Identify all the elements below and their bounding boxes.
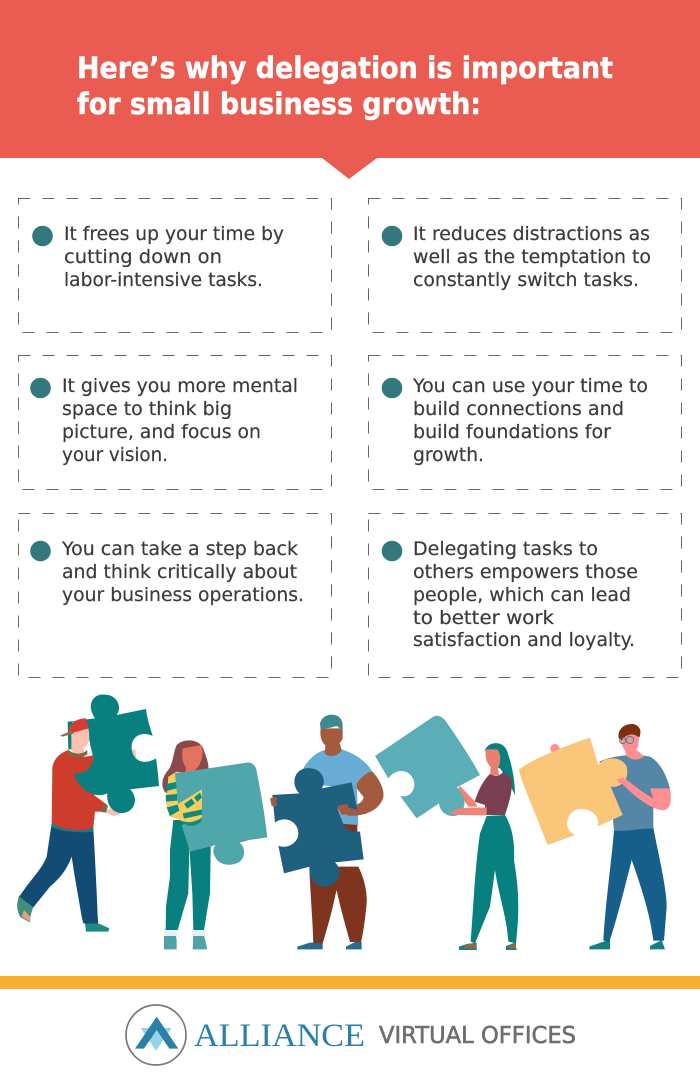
panel: empowers others (368, 514, 682, 678)
logo (126, 1005, 576, 1065)
panel: frees up time: It frees up your time by (64, 223, 284, 245)
panel: step back (18, 514, 332, 678)
puzzle piece: turquoise (375, 716, 487, 818)
panel: mental space: space to think big (62, 398, 232, 420)
panel: reduces distractions: well as the temptation to (413, 246, 651, 268)
panel: build connections (368, 356, 682, 490)
panel: step back: your business operations. (62, 584, 304, 606)
panel: mental space: picture, and focus on (62, 421, 261, 443)
panel: empowers others: others empowers those (413, 561, 638, 583)
panel: empowers others: Delegating tasks to (413, 538, 598, 560)
panel: build connections: build connections and (413, 398, 624, 420)
figure: man with glasses and yellow piece (519, 724, 671, 949)
figure: man in blue t-shirt with dark blue piece (270, 715, 384, 949)
panel: reduces distractions: It reduces distractions as (413, 223, 650, 245)
panel: empowers others: satisfaction and loyalty. (413, 629, 635, 651)
panel: build connections: build foundations for (413, 421, 611, 443)
panel: mental space: your vision. (62, 444, 168, 466)
panel: mental space: It gives you more mental (62, 375, 298, 397)
panel: mental space (18, 356, 332, 490)
panel: reduces distractions: constantly switch tasks. (413, 269, 639, 291)
panel: build connections: You can use your time to (412, 375, 648, 397)
logo mark (126, 1005, 186, 1065)
footer accent bar (0, 976, 700, 989)
illustration: people with puzzle pieces (17, 695, 671, 950)
panel: empowers others: to better work (413, 607, 554, 629)
panel: reduces distractions (368, 198, 682, 332)
logo subtitle: VIRTUAL OFFICES (379, 1023, 576, 1049)
panel: frees up time (18, 198, 332, 332)
figure: woman with light teal piece (162, 740, 267, 949)
header banner (0, 0, 700, 179)
panel: step back: and think critically about (62, 561, 297, 583)
title (77, 51, 613, 121)
panel: frees up time: labor-intensive tasks. (64, 269, 263, 291)
logo wordmark: ALLIANCE (194, 1018, 365, 1054)
title: for small business growth: (77, 87, 481, 121)
panel: frees up time: cutting down on (64, 246, 222, 268)
panel: empowers others: people, which can lead (413, 584, 631, 606)
panel: step back: You can take a step back (61, 538, 298, 560)
figure: woman with turquoise piece (457, 743, 518, 950)
title: Here’s why delegation is important (77, 51, 613, 85)
figure: man in red sweater with teal piece (17, 695, 159, 932)
panel: build connections: growth. (413, 444, 484, 466)
